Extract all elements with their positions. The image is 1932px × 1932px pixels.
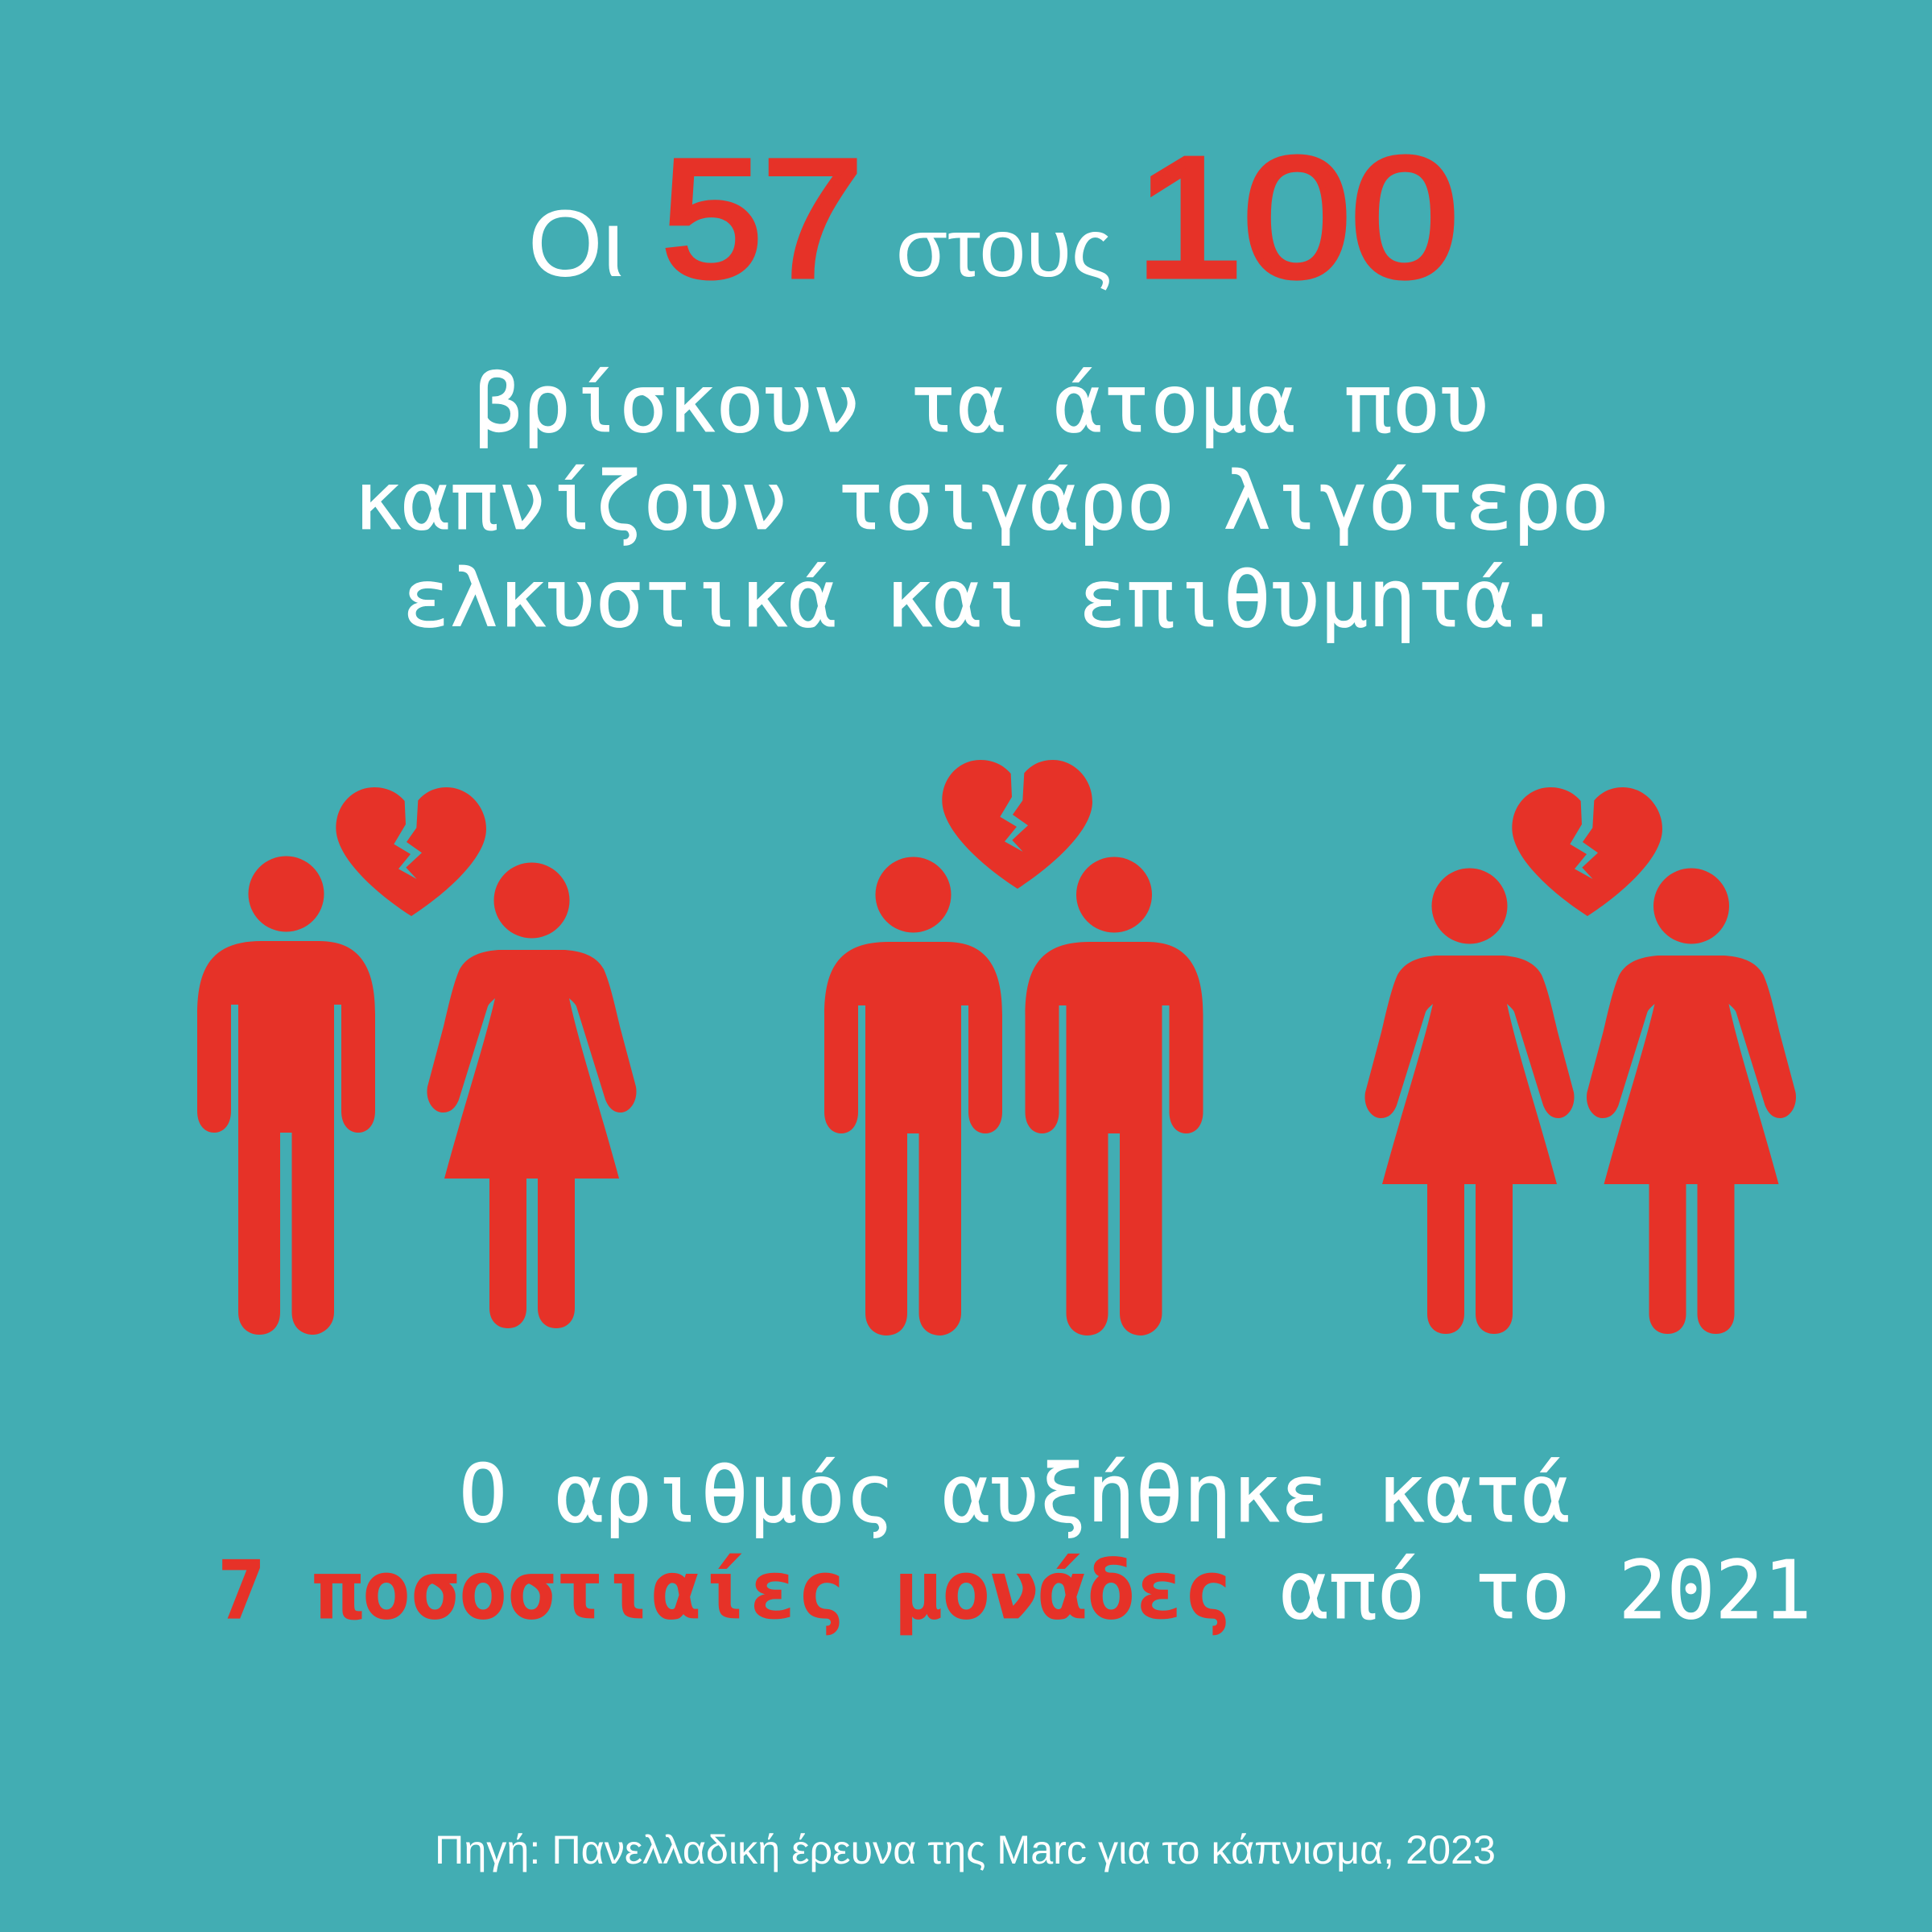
figure group 2: two men, broken heart: [824, 760, 1203, 1335]
statement text: [217, 1447, 1812, 1637]
icon: woman right: [1587, 868, 1796, 1334]
icon: broken heart: [1512, 787, 1662, 916]
title: Οι: [528, 191, 624, 297]
icon: woman: [427, 863, 637, 1328]
title: 57: [662, 126, 863, 312]
subtitle text: ελκυστικά και επιθυμητά.: [402, 551, 1561, 646]
figure group 3: two women, broken heart: [1364, 787, 1796, 1334]
subtitle text: [353, 357, 1609, 646]
icon: broken heart: [336, 787, 486, 916]
title: στους: [896, 202, 1112, 294]
icon: broken heart: [942, 760, 1092, 889]
icon: man: [197, 857, 375, 1335]
subtitle text: καπνίζουν τσιγάρο λιγότερο: [353, 454, 1609, 548]
figure group 1: man, woman, broken heart: [197, 787, 637, 1335]
statement text: 7 ποσοστιαίες μονάδες από το 2021: [217, 1543, 1812, 1637]
icon: man left: [824, 857, 1002, 1335]
title: 100: [1135, 122, 1459, 312]
source note: Πηγή: Πανελλαδική έρευνα της Marc για το κάπνισμα, 2023: [435, 1827, 1496, 1872]
statement text: Ο αριθμός αυξήθηκε κατά: [459, 1447, 1570, 1541]
title: [528, 122, 1459, 312]
icon: woman left: [1364, 868, 1575, 1334]
subtitle text: βρίσκουν τα άτομα που: [474, 357, 1488, 451]
icon: man right: [1026, 857, 1203, 1335]
